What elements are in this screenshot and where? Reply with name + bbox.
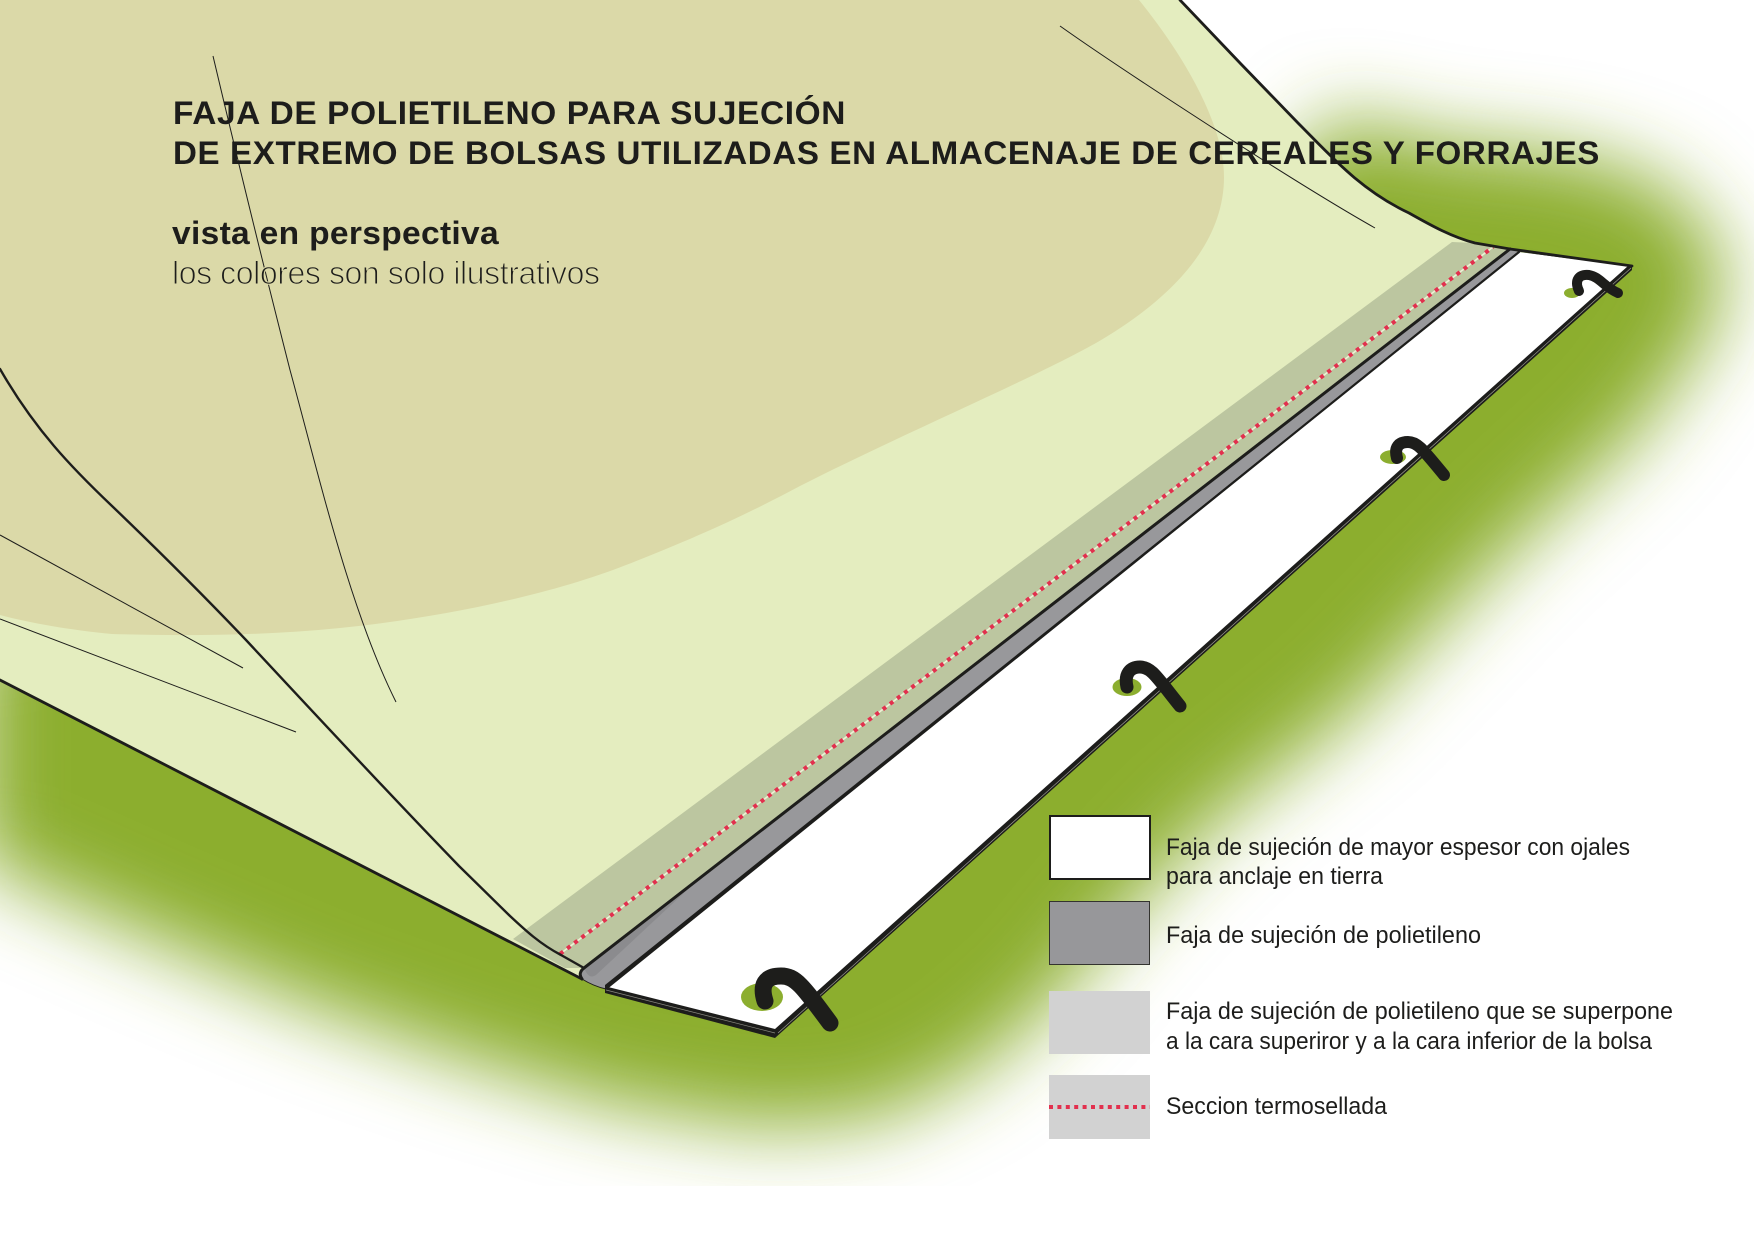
heat-sealed dotted line xyxy=(560,247,1493,954)
legend text: heat-sealed: Seccion termosellada xyxy=(1166,1093,1388,1120)
legend swatch: thick strip xyxy=(1050,816,1150,879)
legend swatch: heat-sealed xyxy=(1049,1075,1150,1139)
title xyxy=(173,95,1600,171)
title: DE EXTREMO DE BOLSAS UTILIZADAS EN ALMACENAJE DE CEREALES Y FORRAJES xyxy=(173,135,1600,171)
legend text: thick strip xyxy=(1166,834,1630,890)
anchor hook 2 xyxy=(1112,667,1180,706)
anchor hook 3 xyxy=(1380,442,1444,475)
legend text: overlap: Faja de sujeción de polietileno que se superpone xyxy=(1166,998,1673,1025)
overlap band of the polyethylene strip xyxy=(513,242,1510,968)
legend swatch: overlap xyxy=(1049,991,1150,1054)
legend text: thick strip: para anclaje en tierra xyxy=(1166,863,1384,890)
beige shaded area on bag xyxy=(0,0,1224,635)
legend swatch: polyethylene strip xyxy=(1050,902,1150,964)
anchor hook 4 xyxy=(1564,275,1618,298)
legend text: polyethylene strip: Faja de sujeción de polietileno xyxy=(1166,922,1481,949)
thin crease lines xyxy=(0,26,1375,732)
legend xyxy=(1049,816,1673,1139)
grey polyethylene strip xyxy=(580,249,1519,989)
anchor hook 1 xyxy=(741,976,830,1023)
legend text: overlap: a la cara superiror y a la cara inferior de la bolsa xyxy=(1166,1028,1653,1055)
bag outlines xyxy=(0,0,1632,989)
bag body xyxy=(0,0,1510,979)
legend text: overlap xyxy=(1166,998,1673,1055)
note: los colores son solo ilustrativos xyxy=(172,255,600,291)
subtitle: vista en perspectiva xyxy=(172,215,499,251)
thick white strip with eyelets xyxy=(605,252,1632,1038)
title: FAJA DE POLIETILENO PARA SUJECIÓN xyxy=(173,95,846,131)
legend text: thick strip: Faja de sujeción de mayor espesor con ojales xyxy=(1166,834,1630,861)
